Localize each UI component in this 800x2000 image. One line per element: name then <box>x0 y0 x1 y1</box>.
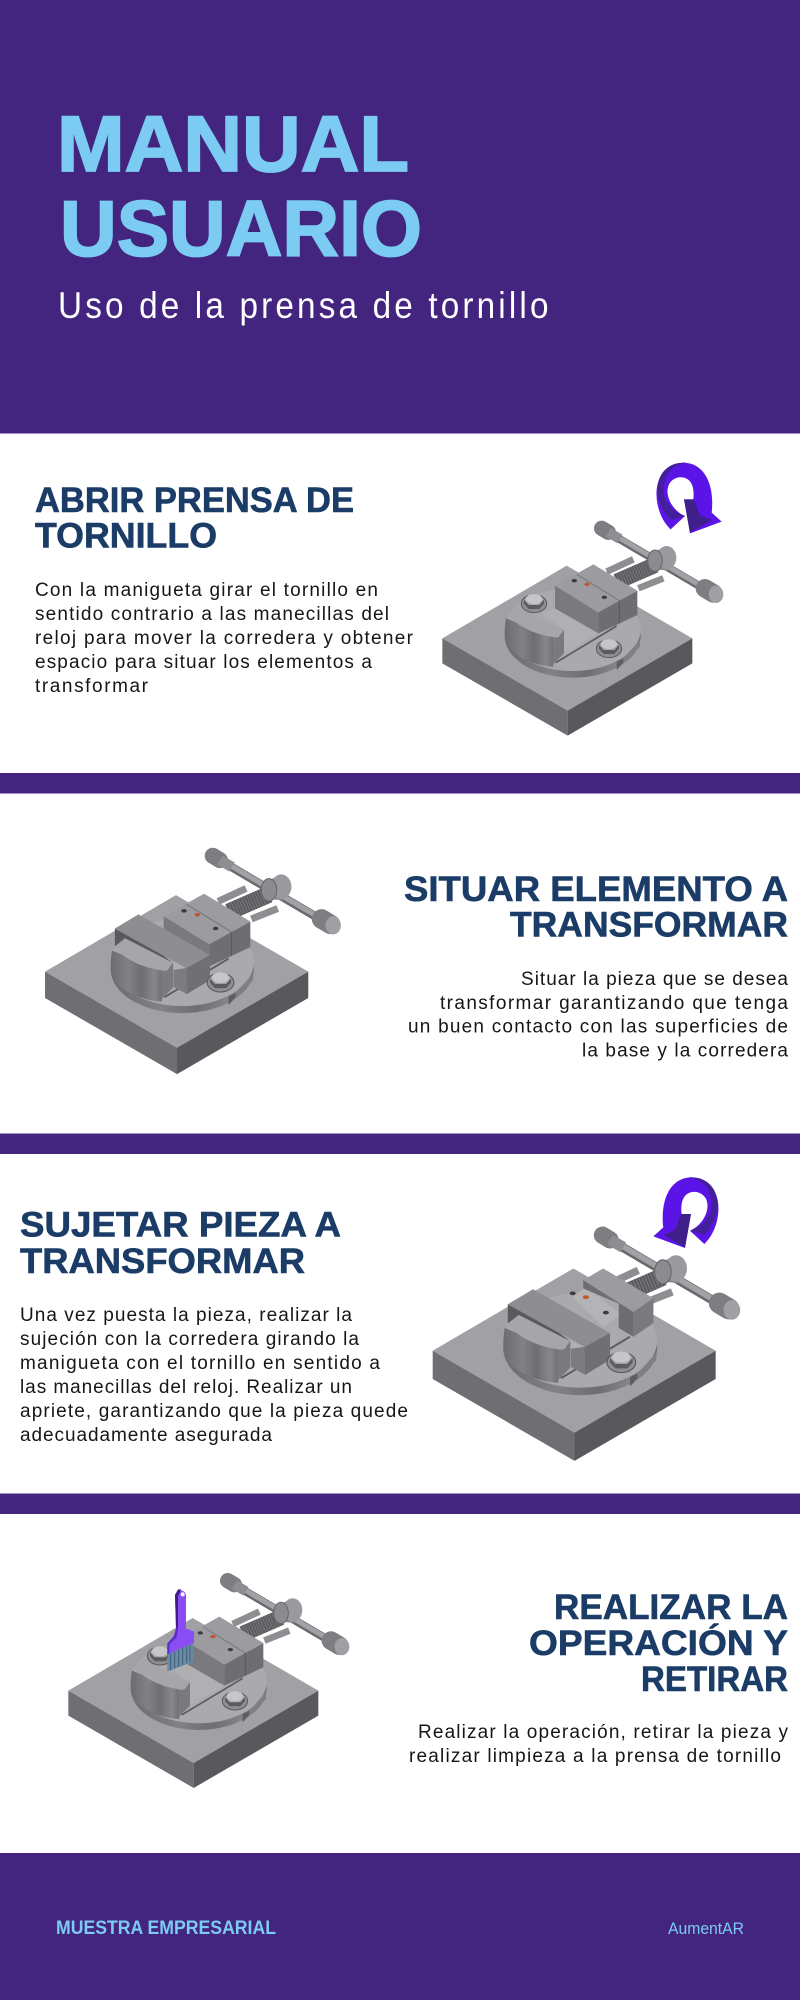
heading: SUJETAR PIEZA A <box>20 1206 341 1245</box>
divider band <box>0 1494 800 1514</box>
body text: Con la manigueta girar el tornillo en <box>35 580 378 601</box>
heading <box>404 870 788 945</box>
body text: reloj para mover la corredera y obtener <box>35 628 414 649</box>
title: MANUAL <box>57 99 409 188</box>
body text <box>20 1305 408 1446</box>
heading: TORNILLO <box>35 517 217 556</box>
heading: ABRIR PRENSA DE <box>35 481 354 520</box>
illustration: vise with brush <box>68 1581 349 1788</box>
panel: footer <box>0 1853 800 2000</box>
body text: realizar limpieza a la prensa de tornillo <box>409 1746 781 1767</box>
illustration: vise open <box>442 528 723 736</box>
icon: clockwise arrow <box>653 1177 718 1248</box>
body text <box>408 969 788 1062</box>
icon: counterclockwise arrow <box>657 462 722 533</box>
heading: TRANSFORMAR <box>510 906 788 945</box>
body text <box>409 1722 788 1767</box>
body text: sujeción con la corredera girando la <box>20 1329 359 1350</box>
illustration: vise clamping <box>433 1235 740 1461</box>
body text <box>35 580 414 697</box>
body text: la base y la corredera <box>582 1041 788 1062</box>
panel: step 1 abrir prensa <box>0 434 800 774</box>
body text: Una vez puesta la pieza, realizar la <box>20 1305 352 1326</box>
heading: OPERACIÓN Y <box>529 1623 788 1663</box>
footer left label: MUESTRA EMPRESARIAL <box>56 1918 276 1939</box>
body text: apriete, garantizando que la pieza quede <box>20 1401 408 1422</box>
body text: manigueta con el tornillo en sentido a <box>20 1353 380 1374</box>
body text: Situar la pieza que se desea <box>521 969 788 990</box>
body text: Realizar la operación, retirar la pieza y <box>418 1722 788 1743</box>
body text: sentido contrario a las manecillas del <box>35 604 389 625</box>
heading <box>529 1588 788 1699</box>
illustration: vise with workpiece <box>45 856 341 1074</box>
divider band <box>0 773 800 794</box>
panel: step 3 sujetar pieza <box>0 1154 800 1494</box>
heading: RETIRAR <box>641 1660 788 1699</box>
body text: las manecillas del reloj. Realizar un <box>20 1377 352 1398</box>
heading: REALIZAR LA <box>554 1588 788 1627</box>
heading <box>35 481 354 556</box>
body text: transformar <box>35 676 149 697</box>
title: USUARIO <box>60 184 422 272</box>
icon: cleaning brush <box>167 1589 194 1672</box>
subtitle: Uso de la prensa de tornillo <box>58 285 548 326</box>
heading: SITUAR ELEMENTO A <box>404 870 788 909</box>
body text: adecuadamente asegurada <box>20 1425 272 1446</box>
body text: un buen contacto con las superficies de <box>408 1017 788 1038</box>
body text: transformar garantizando que tenga <box>440 993 788 1014</box>
panel: header <box>0 0 800 434</box>
body text: espacio para situar los elementos a <box>35 652 372 673</box>
heading: TRANSFORMAR <box>20 1242 305 1281</box>
panel: step 4 realizar operacion <box>0 1514 800 1854</box>
footer right label: AumentAR <box>668 1919 744 1938</box>
title <box>57 99 422 272</box>
panel: step 2 situar elemento <box>0 794 800 1134</box>
divider band <box>0 1134 800 1154</box>
heading <box>20 1206 341 1281</box>
